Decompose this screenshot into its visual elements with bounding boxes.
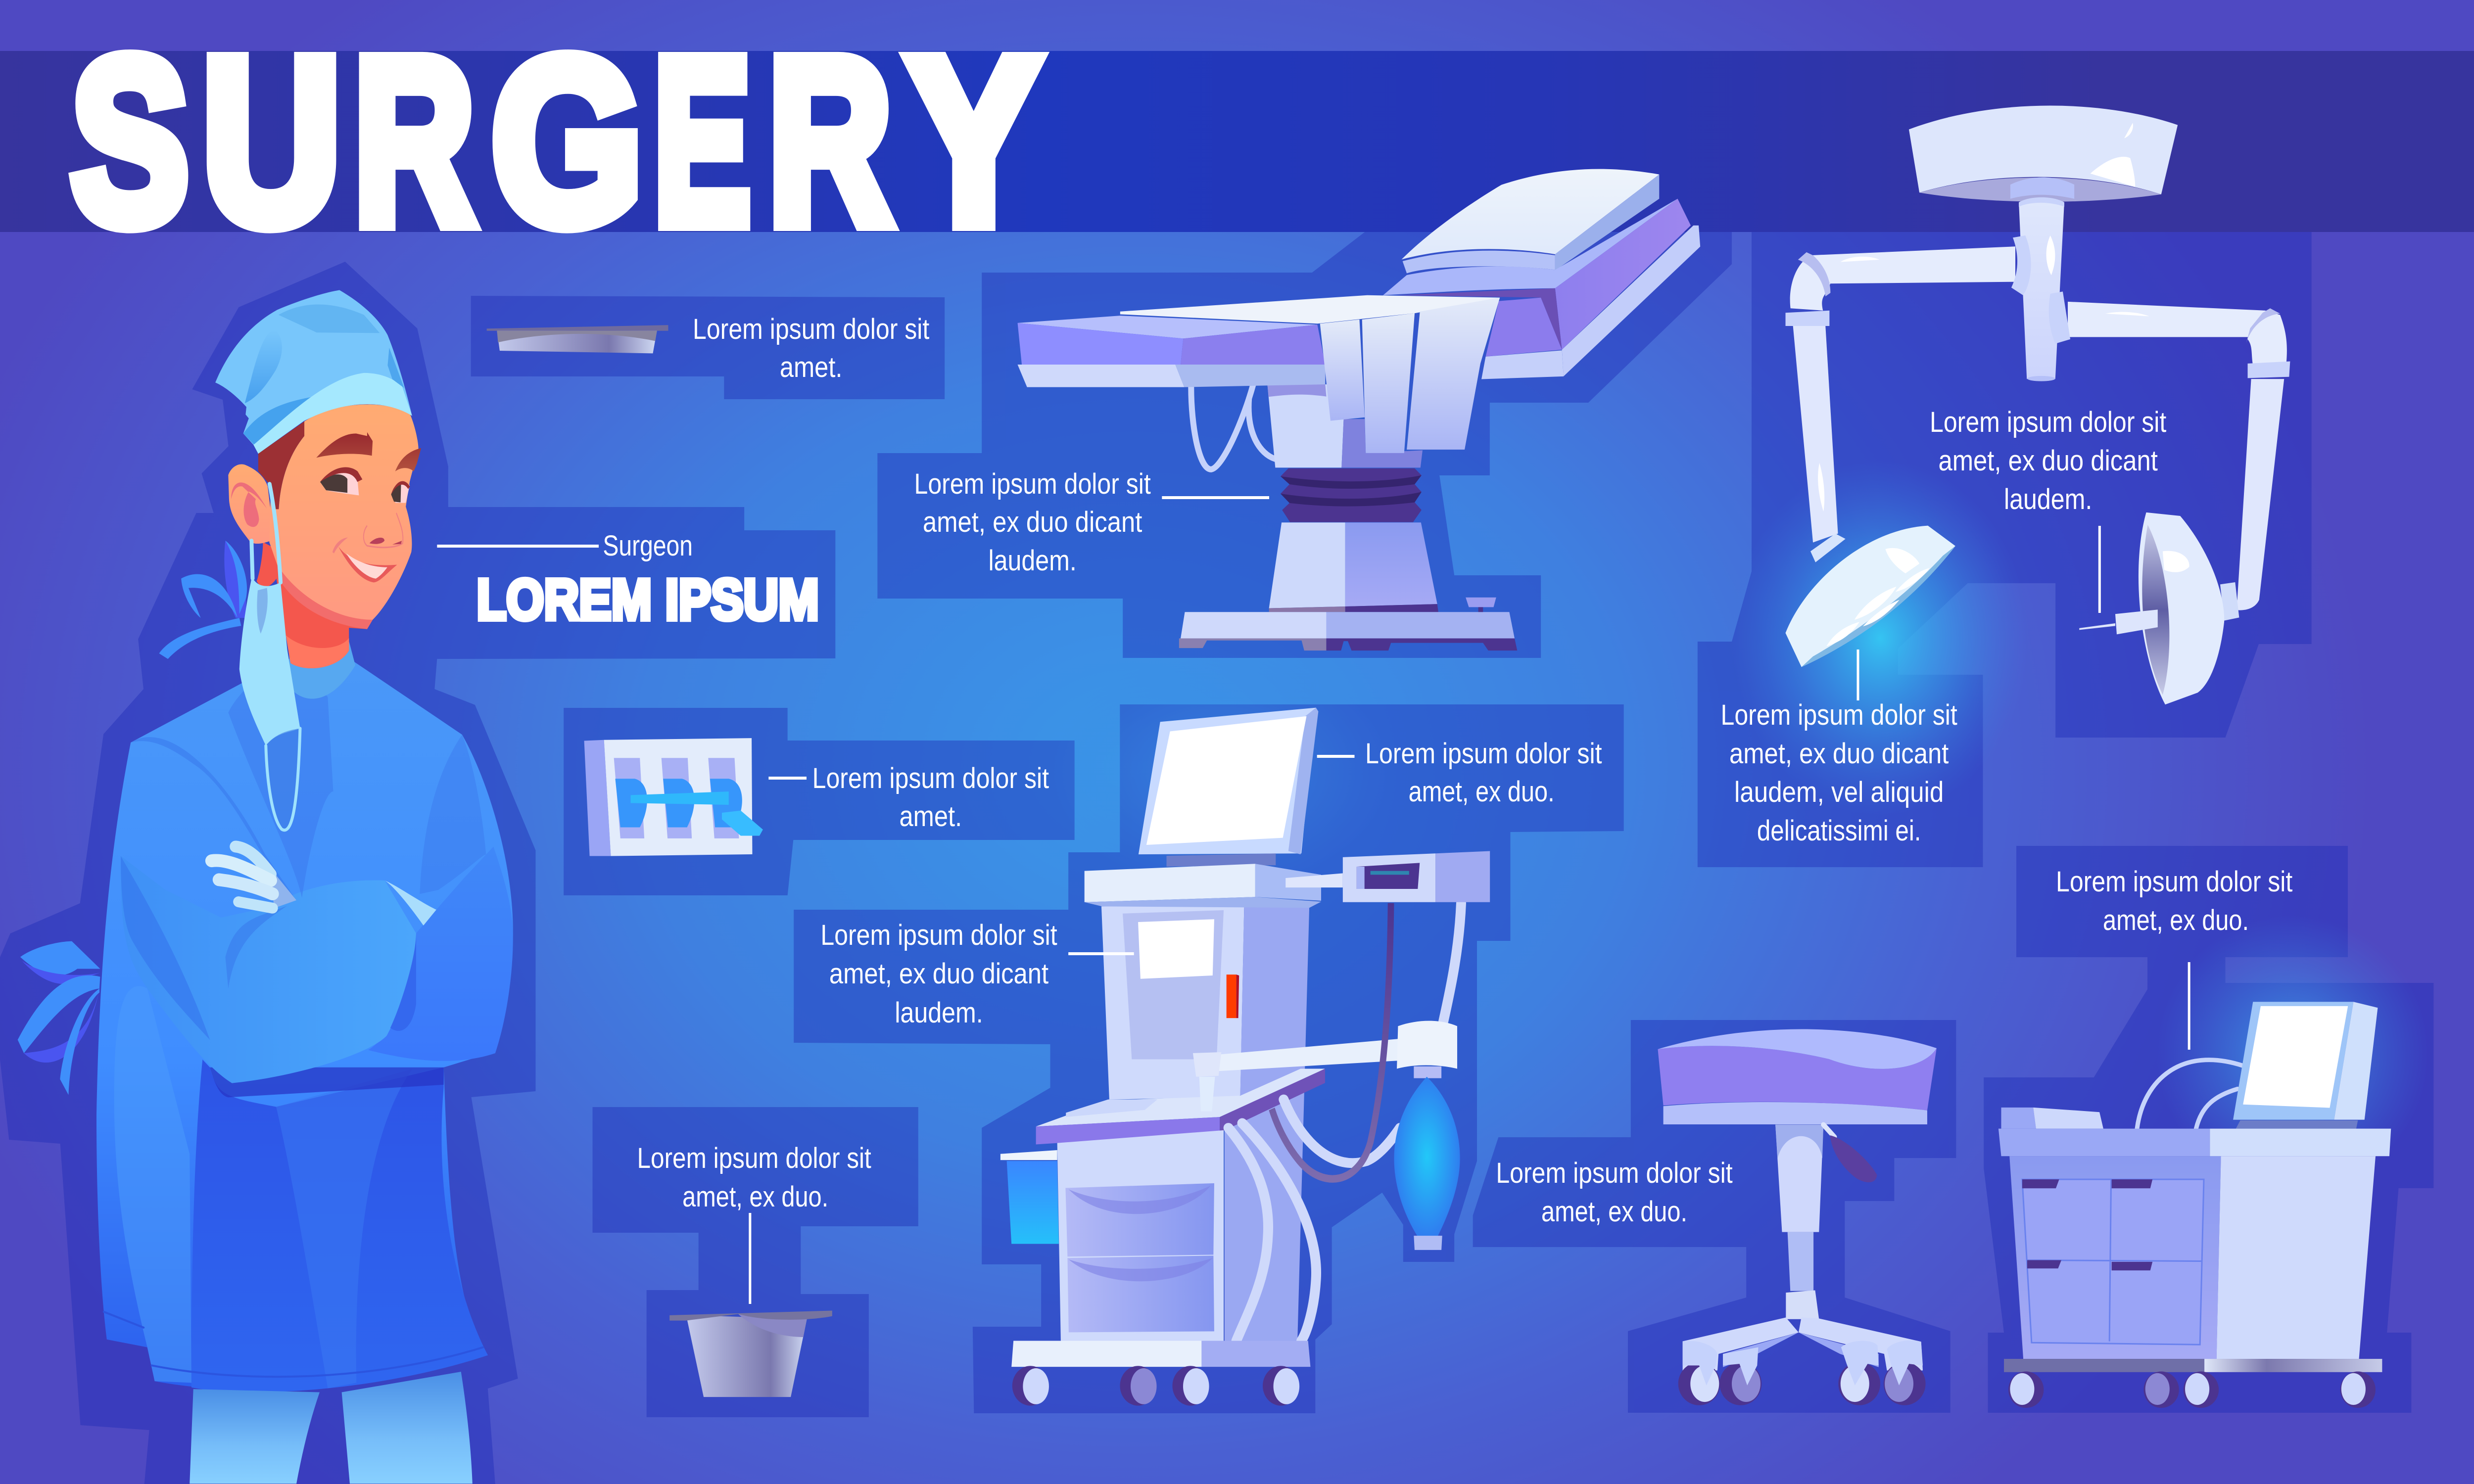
text: cart (2056, 866, 2292, 936)
gown collar (289, 642, 355, 699)
base (1011, 1341, 1201, 1367)
gloved hand (212, 846, 296, 908)
icon: monitor cart (1998, 1002, 2391, 1408)
hair (258, 421, 304, 509)
text: table (914, 468, 1151, 577)
cap lower fold (243, 396, 320, 445)
text: right lamp (1930, 407, 2166, 515)
panel: surgeon backdrop and name (0, 262, 835, 1484)
right downpipe (2236, 379, 2284, 610)
central column (2019, 202, 2064, 379)
bellows (1281, 468, 1422, 522)
face (269, 404, 419, 620)
left elbow (1790, 255, 1830, 311)
leader: table (1162, 496, 1269, 499)
label: surgeon name: LOREM IPSUM (476, 567, 819, 632)
title: U (202, 10, 340, 272)
left lamp (1810, 534, 1846, 562)
sheet (1120, 295, 1500, 324)
eyes (320, 469, 410, 503)
right lamp (2220, 582, 2239, 621)
text: left lamp: delicatissimi ei. (1757, 815, 1921, 847)
column (1267, 384, 1344, 467)
text: switch: Lorem ipsum dolor sit (812, 763, 1049, 794)
body (1101, 903, 1244, 1100)
header band (0, 51, 2474, 232)
irises (320, 474, 401, 503)
text: machine: Lorem ipsum dolor sit (820, 920, 1057, 951)
pedestal (1269, 522, 1345, 608)
wheels (1012, 1366, 1299, 1406)
left arm (1810, 246, 2015, 283)
cap band (253, 373, 412, 454)
text: left lamp: amet, ex duo dicant (1729, 738, 1949, 770)
gown (96, 657, 513, 1392)
text: monitor (1365, 738, 1602, 808)
scrub trousers (190, 1372, 473, 1484)
text: left lamp: laudem, vel aliquid (1734, 777, 1944, 808)
neck highlight (286, 635, 349, 668)
brows (316, 432, 421, 471)
leader: machine (1068, 952, 1134, 955)
cap (215, 290, 412, 454)
text: stool: amet, ex duo. (1541, 1196, 1687, 1228)
ear inner (231, 482, 267, 527)
teeth (346, 554, 387, 579)
right arm (2068, 302, 2265, 337)
panel: stool (1473, 1020, 1956, 1413)
base (1181, 612, 1326, 639)
neck (257, 542, 373, 668)
leader: monitor (1317, 755, 1355, 758)
panel: pan (593, 1107, 918, 1417)
text: machine: laudem. (895, 997, 983, 1029)
cap right shade (387, 348, 404, 388)
panel: surgical lights (1698, 232, 2312, 867)
head cushion (1401, 169, 1659, 259)
nose (364, 513, 403, 548)
hoses (1229, 903, 1461, 1341)
text: right lamp: amet, ex duo dicant (1939, 445, 2158, 477)
text: tray: Lorem ipsum dolor sit (693, 314, 929, 345)
panel: cart (1984, 846, 2433, 1413)
text: switch (812, 763, 1049, 833)
title: E (654, 10, 751, 272)
panel: operating table (877, 232, 1732, 658)
leader: right lamp (2098, 526, 2101, 613)
lamp handle (2115, 609, 2158, 634)
text: stool: Lorem ipsum dolor sit (1496, 1158, 1733, 1189)
text: right lamp: laudem. (2004, 484, 2092, 515)
gown ties back (18, 941, 100, 1095)
eyelids (320, 467, 410, 495)
cheek line (333, 538, 348, 554)
label: surgeon: Surgeon (603, 530, 693, 562)
surgeon head (215, 290, 421, 668)
leader: switch (768, 777, 807, 780)
text: monitor: amet, ex duo. (1409, 776, 1555, 808)
text: pan: Lorem ipsum dolor sit (637, 1143, 871, 1174)
text: tray: amet. (780, 352, 843, 383)
text: tray (693, 314, 929, 383)
text: pan (637, 1143, 871, 1213)
title: R (354, 10, 474, 272)
icon: surgical lights (1786, 106, 2290, 704)
text: cart: amet, ex duo. (2103, 905, 2249, 936)
text: cart: Lorem ipsum dolor sit (2056, 866, 2292, 898)
text: table: Lorem ipsum dolor sit (914, 468, 1151, 500)
blue bin (1000, 1150, 1057, 1160)
back ties (159, 541, 247, 659)
text: table: laudem. (989, 545, 1077, 577)
panel: tray (471, 296, 945, 399)
glow: machine monitor (1047, 653, 1394, 890)
ventilator arm (1219, 1039, 1398, 1071)
leader: cart (2188, 962, 2190, 1050)
ear (228, 464, 274, 544)
panel: anesthesia machine (794, 704, 1624, 1413)
bag connector (1397, 1021, 1457, 1068)
vent head (1285, 873, 1343, 887)
text: switch: amet. (899, 801, 962, 833)
text: table: amet, ex duo dicant (923, 507, 1142, 538)
cap fold (245, 330, 282, 403)
icon: pan (669, 1311, 832, 1397)
label: surgeon leader line (437, 545, 599, 548)
icon: stool (1658, 1029, 1937, 1405)
cap shade (279, 304, 380, 333)
jaw shadow (277, 565, 373, 629)
title: Y (908, 10, 1040, 272)
foot section (1018, 316, 1317, 338)
title: S (71, 10, 189, 272)
text: monitor: Lorem ipsum dolor sit (1365, 738, 1602, 770)
breathing bag (1394, 1077, 1460, 1237)
panel: switch block (564, 708, 1075, 895)
leader: pan (749, 1213, 751, 1304)
title: G (492, 10, 642, 272)
title: R (768, 10, 892, 272)
cables (1191, 384, 1275, 469)
text: left lamp (1721, 699, 1957, 847)
foot pedal (1466, 598, 1496, 607)
icon: switch block (584, 738, 763, 856)
top shelf (1085, 864, 1255, 902)
icon: anesthesia machine (1000, 708, 1490, 1406)
text: machine (820, 920, 1057, 1029)
surgical mask (239, 484, 300, 831)
glow: cart monitor (2156, 915, 2428, 1192)
text: machine: amet, ex duo dicant (829, 958, 1048, 990)
text: left lamp: Lorem ipsum dolor sit (1721, 699, 1957, 731)
left downpipe (1793, 326, 1838, 543)
work surface (1036, 1068, 1325, 1126)
monitor (1139, 708, 1316, 854)
icon: operating table (1018, 169, 1700, 650)
lower cabinet (1057, 1130, 1224, 1341)
text: right lamp: Lorem ipsum dolor sit (1930, 407, 2166, 438)
text: pan: amet, ex duo. (682, 1181, 828, 1213)
text: stool (1496, 1158, 1733, 1228)
ceiling mount (1909, 106, 2178, 194)
surgeon (18, 290, 513, 1484)
right elbow (2248, 311, 2287, 366)
icon: tray (487, 325, 668, 353)
glow: left lamp (1732, 460, 2029, 816)
leader: left lamp (1856, 649, 1859, 700)
nostrils (370, 538, 402, 545)
mouth (338, 547, 397, 582)
